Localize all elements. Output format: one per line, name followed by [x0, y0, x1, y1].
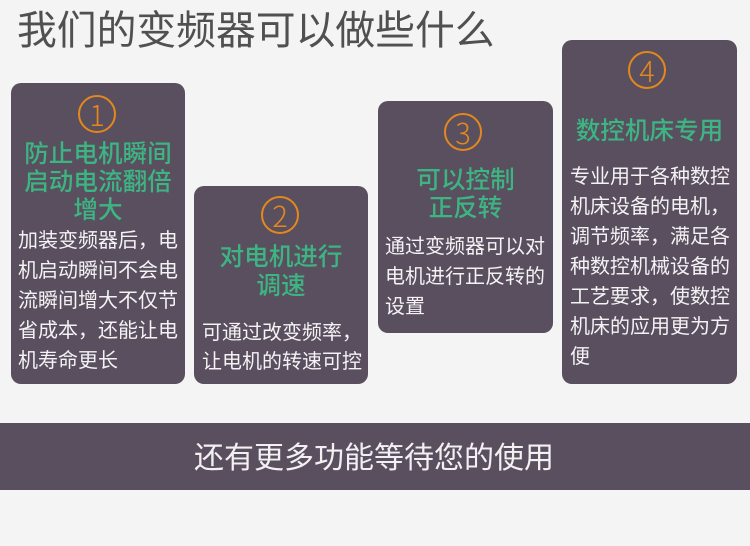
heading 2: 调速	[256, 273, 306, 300]
body text 2: 可通过改变频率，	[202, 322, 362, 344]
panel: card 3	[378, 101, 553, 333]
body text 1: 机寿命更长	[18, 350, 118, 372]
body text 4: 种数控机械设备的	[570, 256, 730, 278]
heading 4: 数控机床专用	[576, 118, 723, 145]
body text 3	[385, 236, 545, 318]
body text 3: 通过变频器可以对	[385, 236, 545, 258]
body text 3: 电机进行正反转的	[385, 266, 545, 288]
body text 4: 机床设备的电机，	[570, 196, 730, 218]
banner	[0, 423, 750, 490]
body text 2: 让电机的转速可控	[202, 351, 362, 373]
body text 1: 省成本，还能让电	[18, 320, 178, 342]
heading 1: 防止电机瞬间	[24, 141, 172, 168]
body text 1: 机启动瞬间不会电	[18, 260, 178, 282]
heading 2	[220, 244, 342, 300]
body text 4: 工艺要求，使数控	[570, 286, 730, 308]
body text 4: 调节频率，满足各	[570, 226, 730, 248]
heading 3: 可以控制	[416, 167, 515, 194]
heading 2: 对电机进行	[220, 244, 342, 271]
panel: card 2	[194, 186, 368, 384]
number 4: 4	[639, 49, 655, 91]
body text 1	[18, 230, 178, 372]
number 4	[628, 51, 666, 89]
body text 4	[570, 166, 730, 368]
panel: card 1	[11, 83, 185, 384]
body text 1: 加装变频器后，电	[18, 230, 178, 252]
number 1	[78, 95, 116, 133]
number 3	[444, 113, 482, 151]
body text 2	[202, 322, 362, 373]
panel: card 4	[562, 40, 737, 384]
title: 我们的变频器可以做些什么	[17, 9, 495, 53]
number 1: 1	[89, 93, 105, 135]
heading 1	[24, 141, 172, 224]
body text 4: 专业用于各种数控	[570, 166, 730, 188]
number 3: 3	[455, 111, 471, 153]
number 2	[261, 196, 299, 234]
heading 3	[416, 167, 515, 222]
body text 3: 设置	[385, 296, 425, 318]
banner text: 还有更多功能等待您的使用	[194, 442, 554, 475]
body text 1: 流瞬间增大不仅节	[18, 290, 178, 312]
body text 4: 便	[570, 346, 590, 368]
number 2: 2	[272, 194, 288, 236]
heading 3: 正反转	[429, 195, 502, 222]
body text 4: 机床的应用更为方	[570, 316, 730, 338]
heading 1: 增大	[73, 197, 123, 224]
heading 1: 启动电流翻倍	[24, 169, 172, 196]
